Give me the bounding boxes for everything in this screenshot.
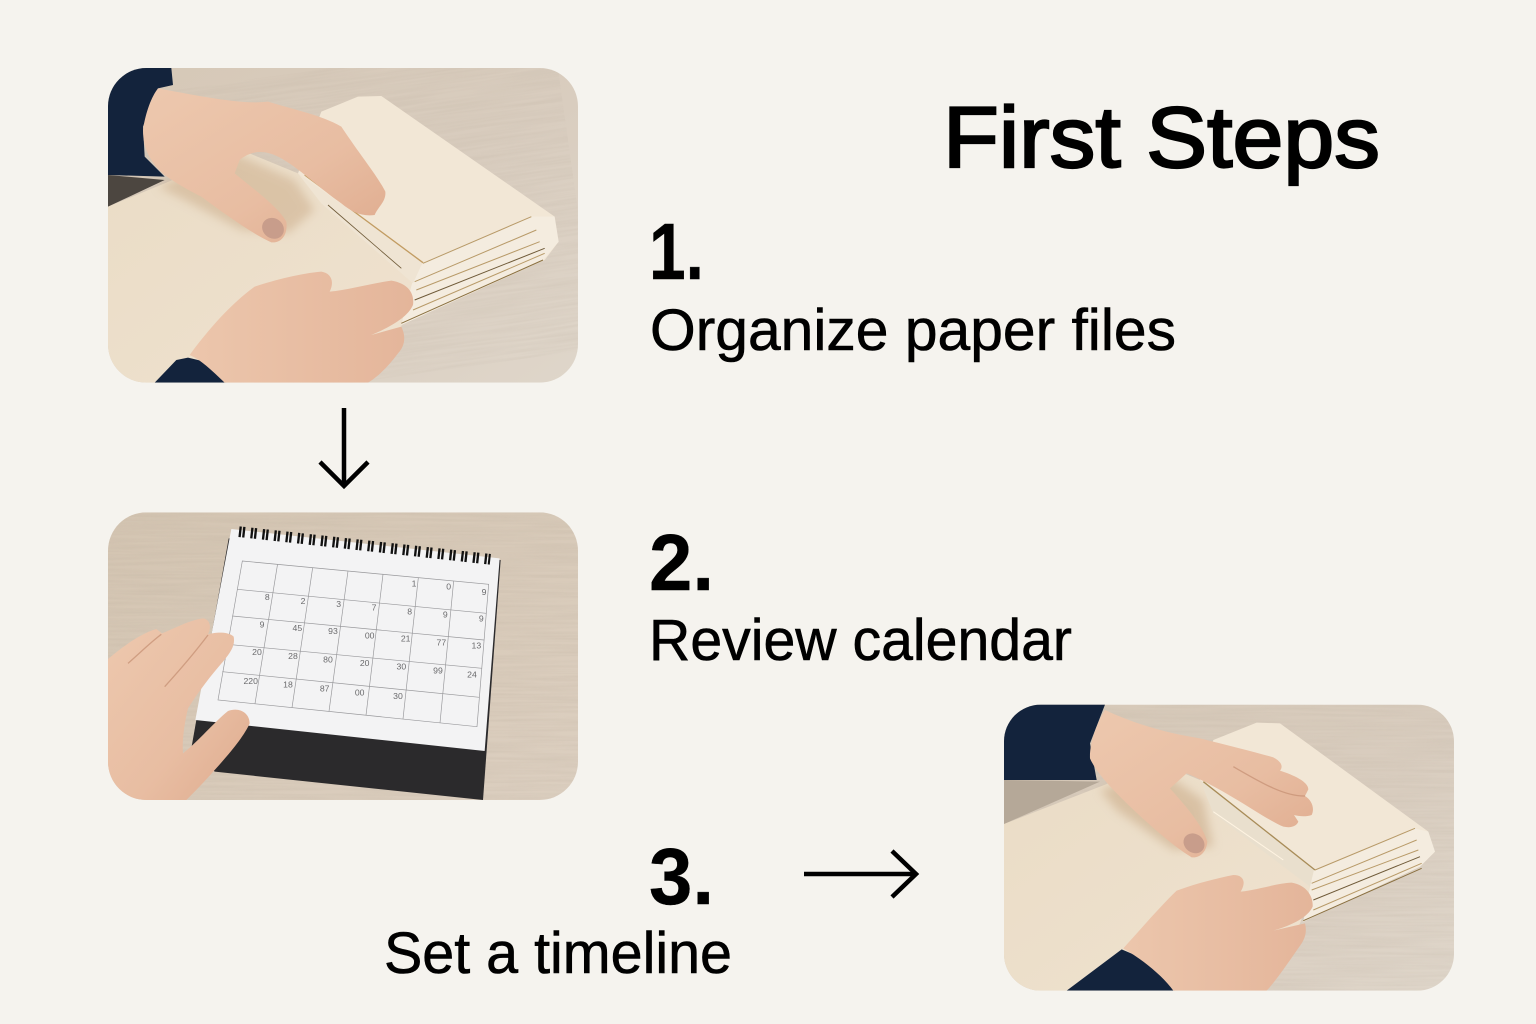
calendar grid	[218, 561, 489, 727]
step 3 label: Set a timeline	[384, 921, 732, 986]
upper thumbnail	[262, 218, 284, 239]
calendar back stand	[191, 538, 501, 800]
calendar dates	[243, 579, 487, 701]
calendar dates: 220	[243, 676, 258, 686]
arrow: right	[804, 851, 916, 897]
calendar dates: 30	[397, 662, 406, 672]
calendar dates: 1	[412, 579, 417, 589]
spiral binding	[239, 532, 490, 559]
calendar dates: 3	[336, 599, 341, 609]
calendar dates: 9	[260, 619, 265, 629]
calendar dates: 13	[472, 640, 481, 650]
calendar dates: 8	[265, 592, 270, 602]
lower hand sleeve	[155, 358, 226, 383]
calendar dates: 9	[443, 610, 448, 620]
calendar dates: 77	[437, 638, 446, 648]
desk shadow beside sleeve	[108, 175, 165, 207]
upper hand	[143, 88, 385, 242]
stack of paper files	[1200, 723, 1435, 922]
paper folder lying open	[1004, 763, 1313, 991]
desk shadow beside sleeve	[1004, 780, 1100, 824]
arrow: down	[320, 408, 368, 486]
paper folder lying open	[108, 150, 415, 383]
calendar dates: 28	[288, 651, 298, 661]
calendar dates: 8	[407, 606, 412, 616]
calendar dates: 00	[365, 630, 375, 640]
folder shadow under upper hand	[1100, 770, 1213, 850]
upper hand sleeve	[1004, 705, 1105, 780]
calendar dates: 20	[360, 658, 370, 668]
step 1 label: Organize paper files	[650, 298, 1176, 363]
folder shadow under upper hand	[158, 153, 315, 233]
calendar dates: 99	[433, 666, 443, 676]
calendar dates: 18	[283, 680, 293, 690]
photo: hands setting files in order	[1004, 705, 1454, 991]
heading: First Steps: First Steps	[943, 90, 1380, 186]
photo: hand on desk calendar	[108, 512, 578, 800]
calendar dates: 20	[252, 647, 262, 657]
calendar dates: 7	[372, 603, 377, 613]
calendar dates: 30	[393, 691, 403, 701]
step 3 number: 3.	[649, 832, 714, 921]
lower hand	[1123, 875, 1313, 991]
calendar dates: 24	[467, 670, 477, 680]
calendar page	[195, 529, 500, 751]
upper thumbnail	[1184, 834, 1204, 854]
step 1 number: 1.	[649, 207, 704, 296]
calendar dates: 0	[446, 581, 451, 591]
calendar dates: 80	[323, 655, 333, 665]
lower hand sleeve	[1067, 949, 1175, 991]
upper hand sleeve	[108, 68, 173, 177]
step 2 label: Review calendar	[649, 608, 1072, 673]
calendar dates: 93	[328, 626, 338, 636]
lower hand	[190, 272, 413, 383]
photo: hands sorting paper files	[108, 68, 578, 383]
calendar dates: 45	[293, 623, 302, 633]
upper hand	[1090, 710, 1313, 857]
finger creases	[1233, 767, 1305, 796]
calendar dates: 9	[482, 587, 487, 597]
stack of paper files	[298, 96, 559, 325]
calendar dates: 21	[401, 634, 411, 644]
step 2 number: 2.	[649, 518, 714, 607]
calendar dates: 2	[301, 596, 306, 606]
calendar dates: 9	[479, 614, 484, 624]
calendar dates: 87	[320, 684, 330, 694]
finger creases	[128, 634, 208, 687]
hand on calendar	[108, 618, 250, 800]
calendar dates: 00	[355, 688, 365, 698]
